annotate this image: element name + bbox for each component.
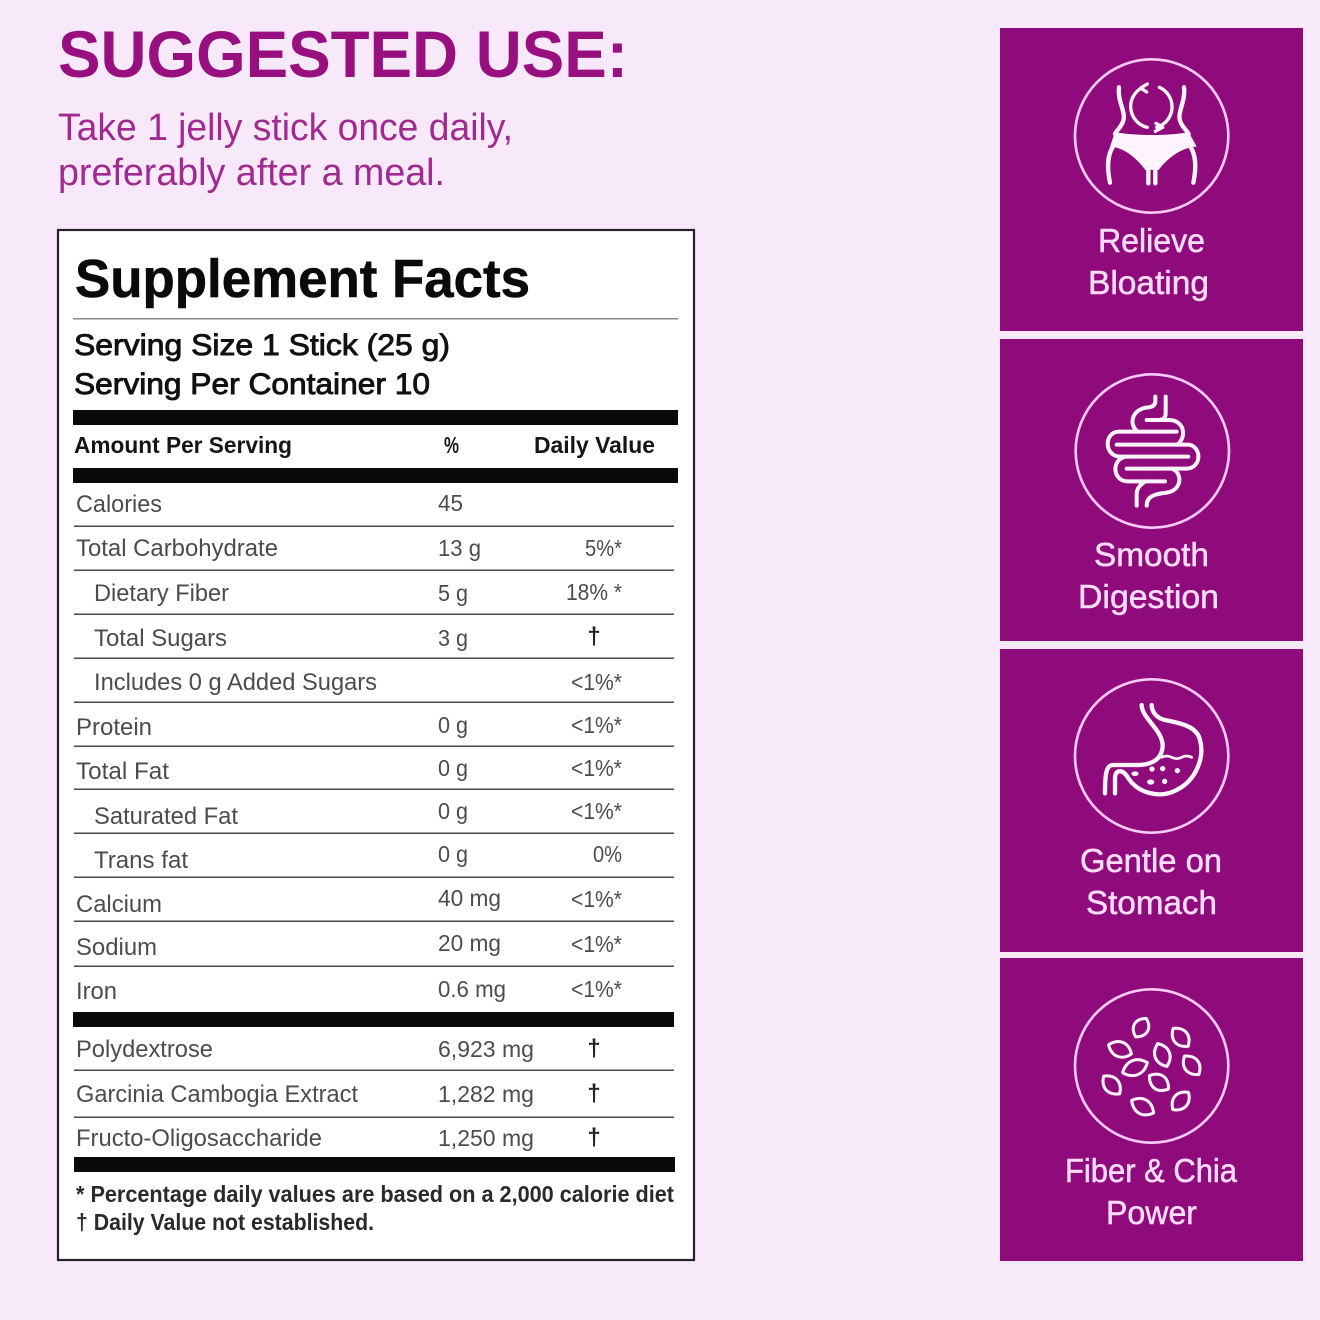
footnotes: † Daily Value not established. [76, 1209, 374, 1235]
row: garcinia cambogia extract: Garcinia Cambogia Extract [76, 1081, 358, 1108]
row: garcinia cambogia extract: † [587, 1080, 601, 1107]
serving information: Serving Per Container 10 [74, 368, 430, 401]
row: saturated fat: Saturated Fat [94, 803, 238, 830]
label: relieve bloating: Bloating [1088, 264, 1209, 301]
row: calories: Calories [76, 491, 162, 518]
row: polydextrose: 6,923 mg [438, 1036, 534, 1062]
label: smooth digestion [1078, 536, 1219, 615]
label: smooth digestion: Digestion [1078, 578, 1219, 615]
label: smooth digestion: Smooth [1094, 536, 1209, 573]
row: added sugars [94, 669, 622, 696]
row: total carbohydrate: 5%* [585, 535, 622, 561]
row: trans fat [94, 841, 622, 874]
row: sodium [76, 930, 622, 961]
label: fiber and chia power: Power [1106, 1194, 1197, 1231]
panel: gentle on stomach [1000, 649, 1303, 952]
footnotes: * Percentage daily values are based on a 2,000 calorie diet [76, 1181, 674, 1207]
supplement facts title: Supplement Facts [75, 249, 530, 309]
icon: intestines [1076, 374, 1229, 528]
row: protein: Protein [76, 714, 152, 741]
label: fiber and chia power: Fiber & Chia [1065, 1152, 1238, 1189]
serving information: Serving Size 1 Stick (25 g) [74, 329, 450, 362]
row: total fat [76, 755, 622, 785]
panel: supplement facts [58, 230, 694, 1260]
serving information [74, 329, 450, 401]
row: dietary fiber [94, 579, 622, 607]
row: iron [76, 976, 622, 1005]
table header: % [444, 432, 459, 458]
row: protein [76, 712, 622, 741]
row: trans fat: Trans fat [94, 847, 188, 874]
table header: Amount Per Serving [74, 432, 292, 458]
row: total carbohydrate: Total Carbohydrate [76, 535, 278, 562]
label: relieve bloating: Relieve [1098, 222, 1205, 259]
row: fructo-oligosaccharide: Fructo-Oligosaccharide [76, 1125, 322, 1152]
panel: smooth digestion [1000, 339, 1303, 641]
row: polydextrose: † [587, 1035, 601, 1062]
row: calories: 45 [438, 490, 463, 516]
row: garcinia cambogia extract: 1,282 mg [438, 1081, 534, 1107]
row: dietary fiber: 18% * [566, 579, 622, 605]
icon: waist with circular arrows [1075, 59, 1228, 213]
row: fructo-oligosaccharide: † [587, 1124, 601, 1151]
row: calories [76, 490, 463, 518]
text block: usage instructions: preferably after a meal. [58, 152, 445, 194]
row: iron: 0.6 mg [438, 976, 506, 1002]
label: relieve bloating [1088, 222, 1209, 301]
row: polydextrose: Polydextrose [76, 1036, 213, 1063]
table header [74, 432, 655, 458]
row: garcinia cambogia extract [76, 1080, 601, 1108]
text block: usage instructions: Take 1 jelly stick once daily, [58, 107, 513, 149]
row: total fat: Total Fat [76, 758, 169, 785]
row: added sugars: Includes 0 g Added Sugars [94, 669, 377, 696]
footnotes [76, 1181, 674, 1235]
row: polydextrose [76, 1035, 601, 1063]
row: total carbohydrate [76, 535, 622, 562]
row: dietary fiber: Dietary Fiber [94, 580, 229, 607]
heading: suggested use: SUGGESTED USE: [58, 17, 628, 91]
panel: fiber and chia power [1000, 958, 1303, 1261]
table header: Daily Value [534, 432, 655, 458]
row: total fat: <1%* [571, 755, 622, 781]
row: saturated fat [94, 798, 622, 830]
row: sodium: 20 mg [438, 930, 501, 956]
row: protein: 0 g [438, 712, 468, 738]
label: gentle on stomach [1080, 842, 1222, 921]
row: fructo-oligosaccharide: 1,250 mg [438, 1125, 534, 1151]
row: total fat: 0 g [438, 755, 468, 781]
label: fiber and chia power [1065, 1152, 1238, 1231]
row: saturated fat: 0 g [438, 798, 468, 824]
row: iron: <1%* [571, 976, 622, 1002]
label: gentle on stomach: Stomach [1086, 884, 1217, 921]
row: added sugars: <1%* [571, 669, 622, 695]
row: total sugars: Total Sugars [94, 625, 227, 652]
row: total sugars: 3 g [438, 625, 468, 651]
row: protein: <1%* [571, 712, 622, 738]
row: saturated fat: <1%* [571, 798, 622, 824]
row: total carbohydrate: 13 g [438, 535, 481, 561]
row: trans fat: 0 g [438, 841, 468, 867]
row: trans fat: 0% [593, 841, 622, 867]
row: dietary fiber: 5 g [438, 580, 468, 606]
row: calcium: 40 mg [438, 885, 501, 911]
row: calcium: <1%* [571, 886, 622, 912]
row: calcium: Calcium [76, 891, 162, 918]
row: total sugars: † [587, 623, 601, 650]
label: gentle on stomach: Gentle on [1080, 842, 1222, 879]
row: iron: Iron [76, 978, 117, 1005]
row: fructo-oligosaccharide [76, 1124, 601, 1152]
row: sodium: Sodium [76, 934, 157, 961]
row: calcium [76, 885, 622, 918]
row: sodium: <1%* [571, 931, 622, 957]
row: total sugars [94, 623, 601, 652]
icon: chia seeds [1075, 989, 1228, 1143]
icon: stomach [1075, 679, 1228, 833]
panel: relieve bloating [1000, 28, 1303, 331]
text block: usage instructions [58, 107, 513, 194]
